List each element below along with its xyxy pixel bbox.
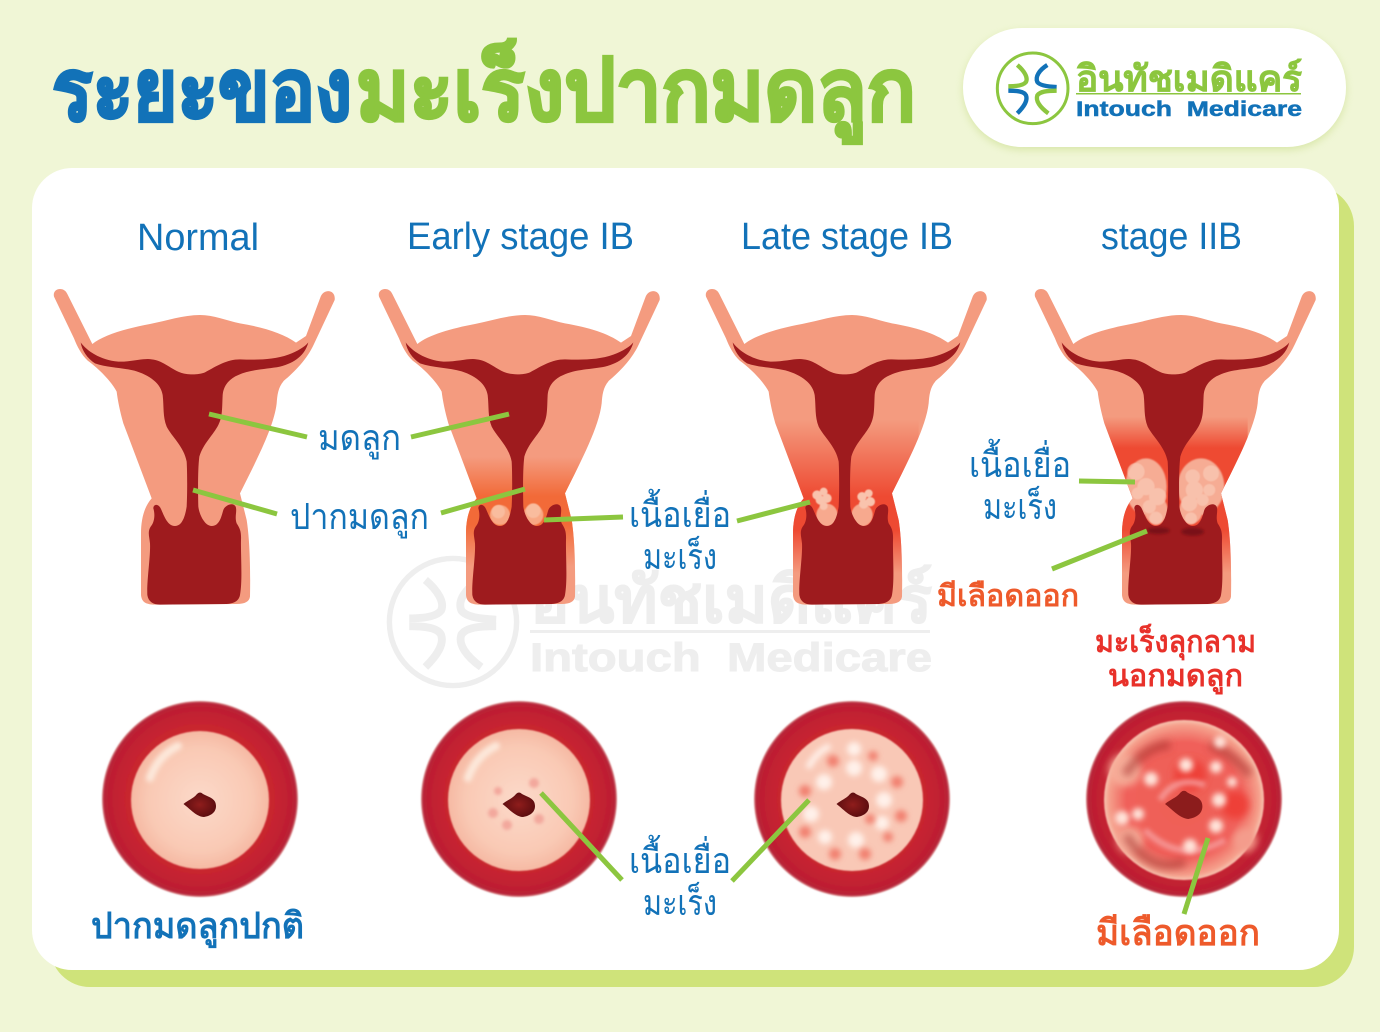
label: tumor cross-section [629,834,731,923]
panel shadow [50,186,1354,987]
heading: stage IIB: stage IIB [1101,216,1242,258]
leader line: cross-section IIB bleeding [1184,838,1208,914]
label: tumor cross-section: เนื้อเยื่อ [629,834,731,881]
caption: normal cervix: ปากมดลูกปกติ [91,905,304,949]
logo mark [997,53,1068,124]
title: มะเร็งปากมดลูก [356,38,916,144]
leader line: cross-section early [541,793,622,880]
leader line: cross-section late [732,800,809,881]
cross-section: early stage [421,701,617,897]
heading: Late stage IB: Late stage IB [741,216,953,258]
leader line: cervix left [193,490,277,514]
label: tumor IIB [969,438,1071,527]
label: cervix: ปากมดลูก [290,496,429,539]
watermark: อินทัชเมดิแคร์ [530,564,932,636]
label: invasion beyond uterus: มะเร็งลุกลาม [1095,623,1256,661]
title: ระยะของ [52,43,352,139]
logo badge [963,28,1346,150]
leader line: tumor late [737,502,810,521]
watermark: Intouch Medicare [530,636,932,680]
label: invasion beyond uterus [1095,623,1256,695]
label: tumor IIB: เนื้อเยื่อ [969,438,1071,485]
leader line: tumor IIB [1079,481,1135,482]
leader line: bleeding IIB [1052,531,1147,569]
logo English name: Intouch Medicare [1076,98,1302,121]
watermark [389,558,932,686]
leader line: tumor early [544,517,623,520]
label: tumor early/late [629,488,731,577]
title [52,38,916,144]
leader line: uterus right [411,414,509,437]
cross-section: late stage [754,701,950,897]
label: tumor IIB: มะเร็ง [983,484,1057,527]
cross-section: normal [102,701,298,897]
caption: bleeding: มีเลือดออก [1096,912,1260,953]
leader line: uterus left [209,414,307,437]
uterus: normal [54,289,335,605]
leader line: cervix right [441,489,525,513]
uterus: early stage IB [379,289,660,607]
label: bleeding: มีเลือดออก [937,580,1079,613]
main panel [32,168,1339,970]
label: tumor early/late: มะเร็ง [643,534,717,577]
logo Thai name: อินทัชเมดิแคร์ [1076,58,1303,99]
heading: Early stage IB: Early stage IB [407,216,634,258]
cross-section: stage IIB [1086,701,1282,897]
label: tumor early/late: เนื้อเยื่อ [629,488,731,535]
uterus: stage IIB [1035,289,1316,607]
bleeding shadows [1147,527,1204,536]
label: uterus: มดลูก [318,417,401,460]
label: invasion beyond uterus: นอกมดลูก [1108,660,1243,695]
heading: Normal: Normal [137,217,259,259]
label: tumor cross-section: มะเร็ง [643,880,717,923]
uterus: late stage IB [706,289,987,607]
